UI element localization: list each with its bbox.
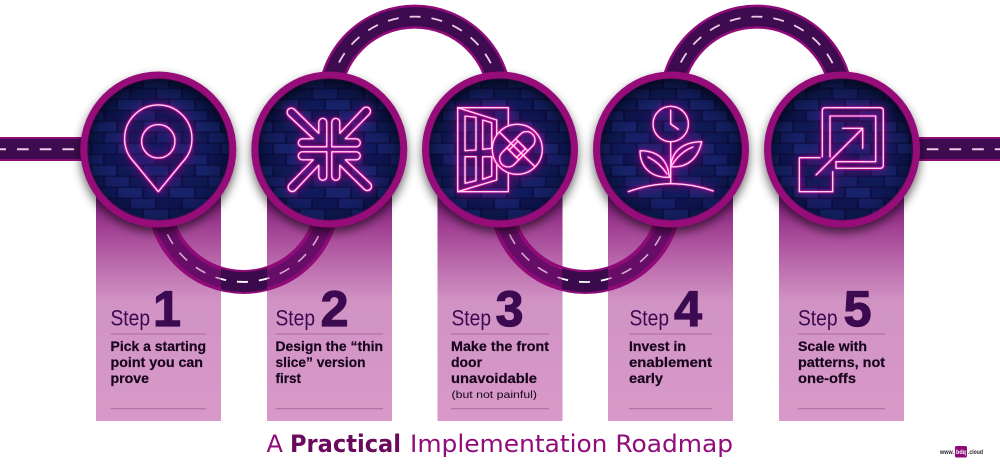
icon: plant growing from clock [628,106,713,192]
step 4 number: 4 [674,281,702,337]
step 3 number: 3 [496,281,523,337]
step 3 label: Step [452,306,491,330]
road: lower arc between steps 1 and 2 [152,225,335,294]
step 1 number: 1 [153,281,181,337]
logo: bdq.cloud: .cloud [968,449,983,456]
panel: step 3 [438,195,562,421]
icon: four arrows pointing inward [287,107,372,192]
badge: step 5 scaling squares [764,72,920,228]
title [266,430,733,458]
icon: location pin [125,105,192,192]
step 1 description: prove [110,370,149,386]
step 4 label: Step [630,306,669,330]
logo: bdq.cloud: www. [939,449,954,456]
step 4 description: early [629,370,663,386]
step 5 description [798,338,885,386]
step 3 description [451,338,549,386]
road: left entry [0,137,90,161]
panel: step 2 [267,195,392,421]
icon: small square expanding to large square [799,108,883,192]
badge: step 2 converging arrows [251,72,407,228]
title: A [266,430,284,458]
road: upper arc between steps 2 and 3 [329,17,500,102]
step 5 label: Step [798,306,838,330]
step 3 description: unavoidable [451,370,537,386]
road: right exit [910,137,1000,161]
step 1 description: point you can [110,354,203,370]
step 2 description: slice” version [276,354,366,370]
step 2 number: 2 [321,281,348,337]
panel: step 4 [608,195,733,421]
step 2 description: Design the “thin [276,338,383,354]
step 5 description: one-offs [798,370,856,386]
step 2 label: Step [276,306,315,330]
step 4 description: Invest in [629,338,686,354]
panel: step 1 [96,195,221,421]
title: Practical [290,430,401,458]
step 3 description: Make the front [451,338,549,354]
step 5 number: 5 [844,281,871,337]
panel: step 5 [779,195,904,421]
step 3 note: (but not painful) [452,389,537,401]
badge: step 4 plant with clock [593,72,749,228]
icon: open door with prohibited bandage [458,108,542,192]
step 3 description: door [451,354,483,370]
step 5 description: Scale with [798,338,867,354]
step 1 label: Step [110,306,150,330]
step 2 description [276,338,383,386]
step 2 description: first [276,370,301,386]
logo: bdq.cloud: bdq [956,449,966,456]
step 4 description: enablement [629,354,712,370]
step 4 description [629,338,712,386]
badge: step 1 location pin [80,72,236,228]
road: upper arc between steps 4 and 5 [671,17,842,102]
step 5 description: patterns, not [798,354,885,370]
step 1 description: Pick a starting [110,338,206,354]
badge: step 3 door and bandage [422,72,578,228]
road: lower arc between steps 3 and 4 [494,225,677,294]
step 1 description [110,338,206,386]
logo: bdq.cloud [939,446,983,458]
title: Implementation Roadmap [410,430,733,458]
